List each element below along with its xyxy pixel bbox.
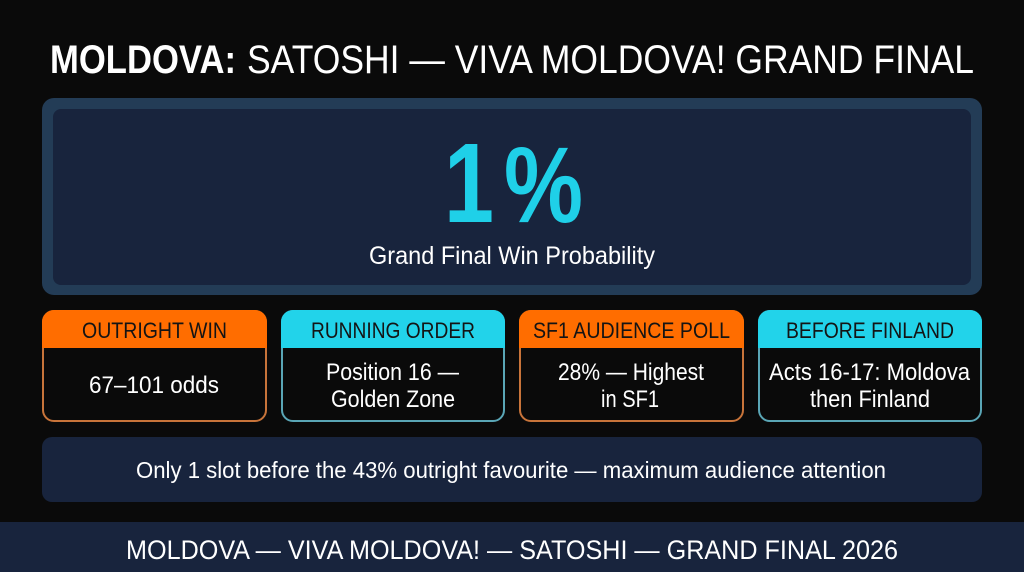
card value: then Finland — [810, 386, 930, 413]
card: SF1 audience poll — [519, 310, 744, 421]
callout banner: Only 1 slot before the 43% outright favourite — maximum audience attention — [136, 457, 886, 483]
big number: 1%: % — [504, 124, 583, 245]
card value — [558, 359, 704, 413]
card value: 28% — Highest — [558, 359, 704, 386]
card value: in SF1 — [601, 386, 659, 413]
probability caption: Grand Final Win Probability — [369, 242, 655, 270]
card: outright win — [42, 310, 267, 421]
card value: Position 16 — — [326, 359, 459, 386]
card value: Golden Zone — [331, 386, 455, 413]
card value: 67–101 odds — [89, 372, 219, 399]
card heading: OUTRIGHT WIN — [82, 318, 227, 343]
card: running order — [281, 310, 505, 421]
card heading: BEFORE FINLAND — [786, 318, 954, 343]
big number: 1% — [444, 120, 583, 246]
panel: win probability — [42, 98, 982, 295]
big number: 1%: 1 — [444, 120, 494, 246]
card heading: SF1 AUDIENCE POLL — [533, 318, 730, 343]
card: before Finland — [758, 310, 982, 421]
card heading: RUNNING ORDER — [311, 318, 475, 343]
card value — [326, 359, 459, 413]
footer bar — [0, 522, 1024, 572]
footer bar: MOLDOVA — VIVA MOLDOVA! — SATOSHI — GRAND FINAL 2026 — [126, 535, 898, 565]
callout banner — [42, 437, 982, 502]
card value — [769, 359, 971, 413]
card value: Acts 16-17: Moldova — [769, 359, 971, 386]
title: MOLDOVA: — [50, 38, 236, 82]
